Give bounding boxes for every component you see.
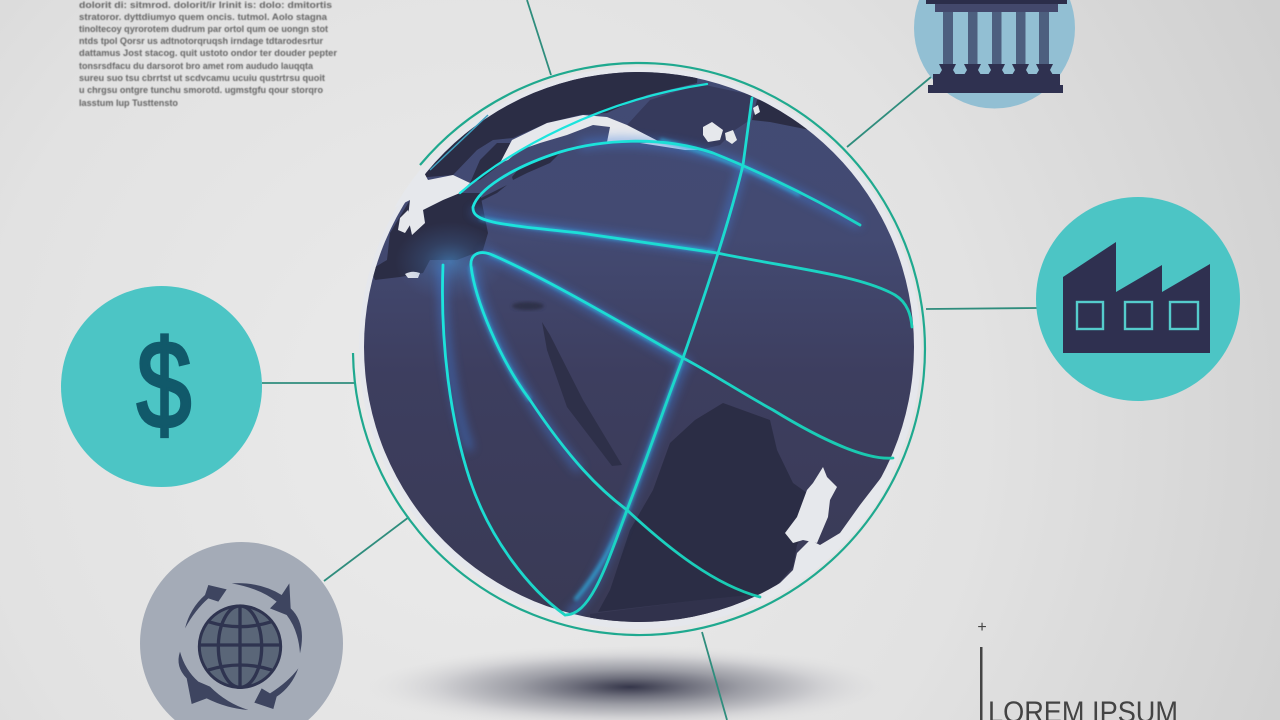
icon: bank xyxy=(914,0,1075,108)
body text block: dattamus Jost stacog. quit ustoto ondor ter douder pepter xyxy=(79,48,338,58)
body text block: dolorit di: sitmrod. dolorit/ir Irinit is: dolo: dmitortis xyxy=(79,0,332,10)
ground shadow under globe xyxy=(365,645,895,720)
body text block: tinoltecoy qyrorotem dudrum par ortol qum oe uongn stot xyxy=(79,24,328,34)
icon: factory xyxy=(1036,197,1240,401)
decorative plus mark: + xyxy=(977,619,987,636)
body text block: tonsrsdfacu du darsorot bro amet rom aududo lauqqta xyxy=(79,61,314,71)
body text block xyxy=(79,0,338,108)
icon: dollar: $ xyxy=(137,315,191,455)
dark continent xyxy=(598,403,807,612)
connector lines xyxy=(262,0,1037,720)
icon: globe with arrows xyxy=(140,542,343,720)
globe rim xyxy=(359,67,921,629)
globe sphere xyxy=(364,72,914,622)
body text block: stratoror. dyttdiumyo quem oncis. tutmol. Aolo stagna xyxy=(79,12,328,22)
thin arc on arctic band xyxy=(430,115,488,170)
title bar xyxy=(980,647,982,720)
orbit ring xyxy=(353,63,925,635)
network glow xyxy=(395,140,860,615)
globe xyxy=(350,50,925,640)
dark land masses xyxy=(373,72,808,622)
network lines xyxy=(442,84,912,615)
icon: dollar xyxy=(61,286,262,487)
body text block: sureu suo tsu cbrrtst ut scdvcamu ucuiu qustrtrsu quoit xyxy=(79,73,325,83)
body text block: Iasstum Iup Tusttensto xyxy=(79,98,179,108)
body text block: u chrgsu ontgre tunchu smorotd. ugmstgfu qour storqro xyxy=(79,85,323,95)
lower globe shade xyxy=(590,594,760,622)
body text block: ntds tpol Qorsr us adtnotorqruqsh irndage tdtarodesrtur xyxy=(79,36,323,46)
white land areas xyxy=(398,105,891,584)
dark sliver xyxy=(542,322,622,466)
